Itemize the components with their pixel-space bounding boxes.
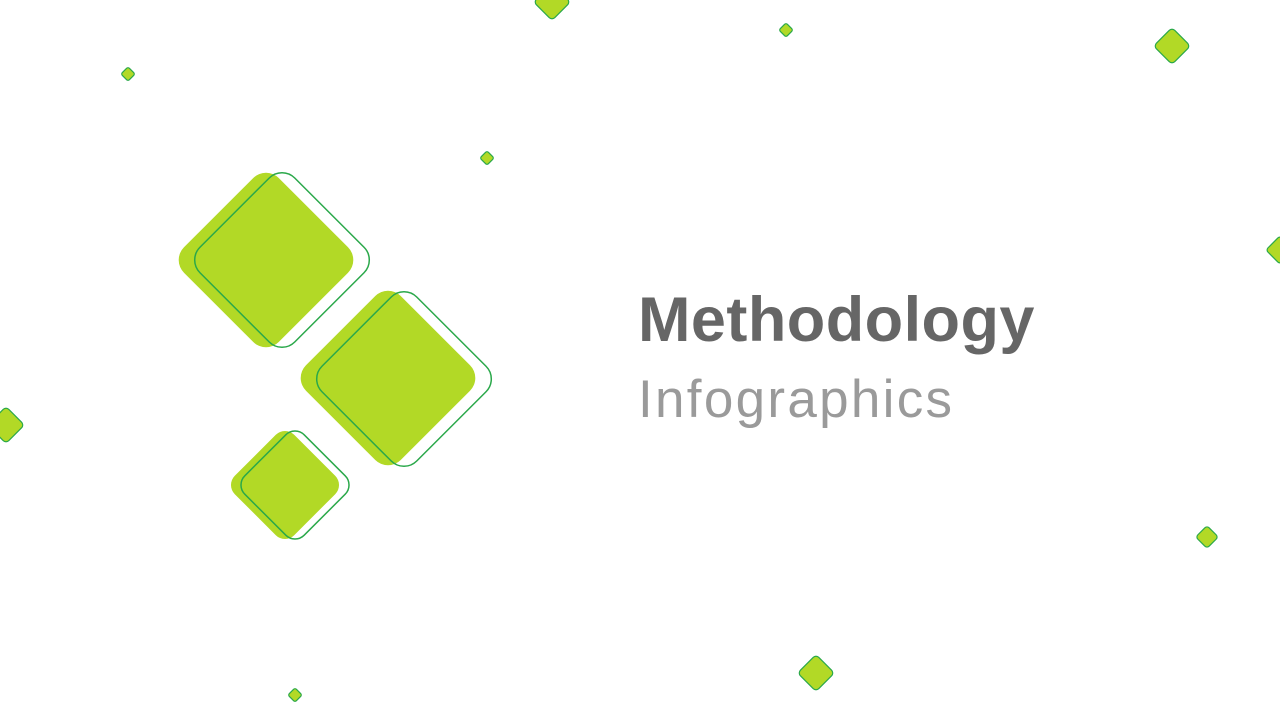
big diamond 2: [293, 283, 499, 474]
subtitle: Infographics: [638, 370, 954, 429]
title: Methodology: [638, 285, 1035, 355]
big diamond 3: [226, 426, 354, 544]
big diamond 1: [171, 165, 377, 355]
